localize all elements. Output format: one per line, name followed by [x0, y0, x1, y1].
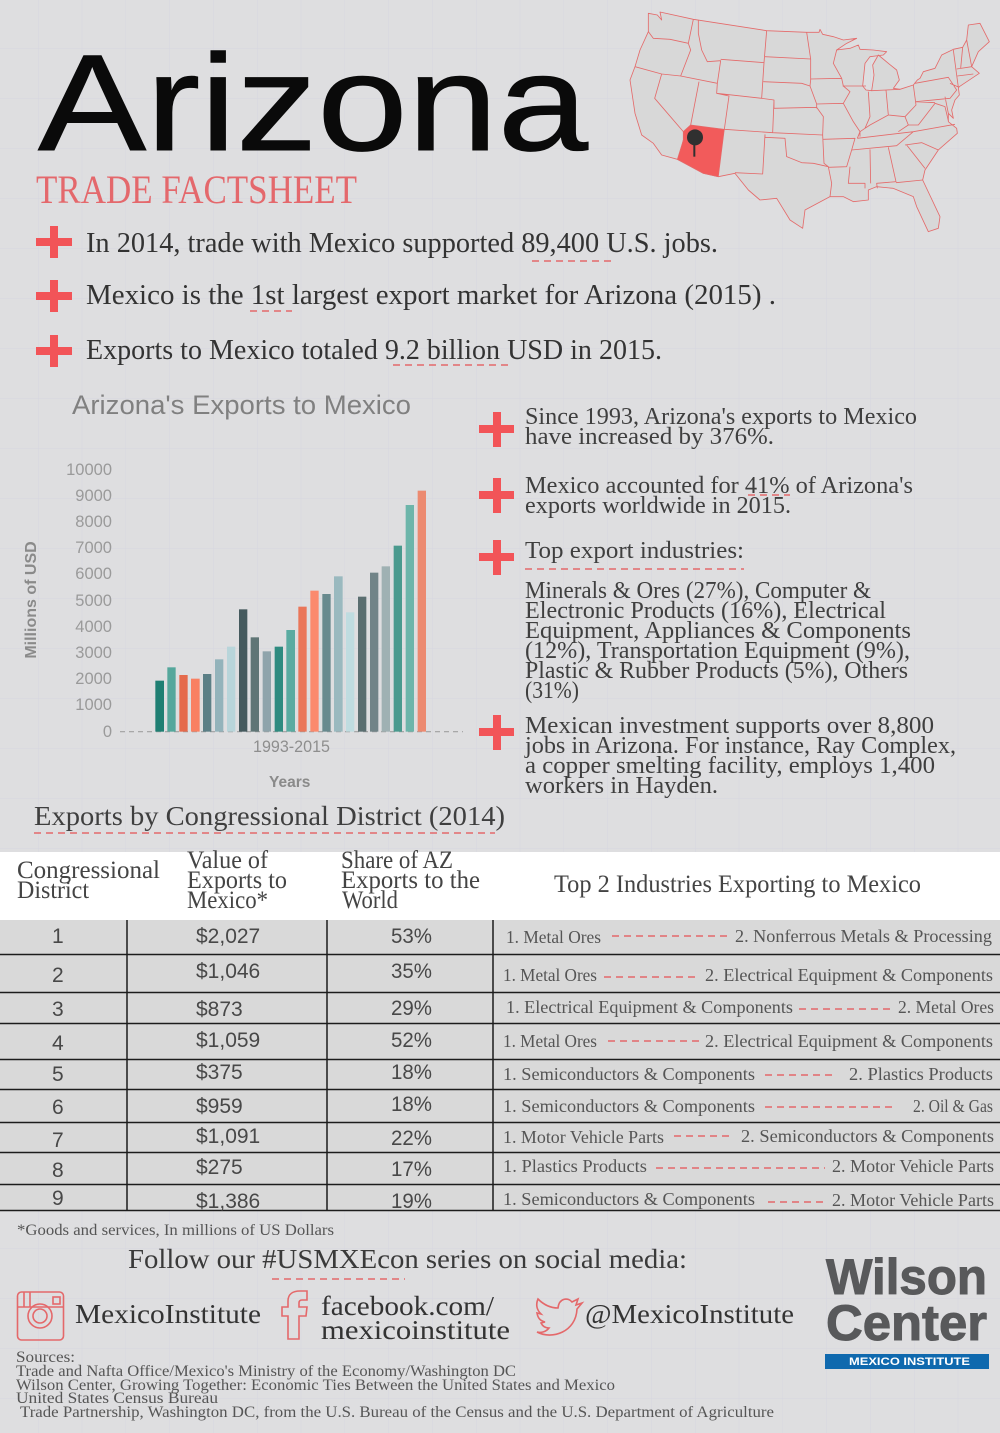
row 4: 4: [52, 1032, 64, 1055]
row 7: [52, 1125, 994, 1152]
row 3: 2. Metal Ores: [898, 997, 994, 1017]
fact: export growth: [479, 403, 917, 450]
fact: top export industries: (12%), Transportation Equipment (9%),: [525, 637, 910, 664]
twitter handle: @MexicoInstitute: [585, 1299, 794, 1329]
row 5: 18%: [391, 1061, 432, 1084]
row 4: 1. Metal Ores: [503, 1031, 597, 1051]
sources: Wilson Center, Growing Together: Economic Ties Between the United States and Mexico: [16, 1377, 615, 1394]
row 6: $959: [196, 1095, 243, 1118]
y axis ticks: 1000: [75, 696, 112, 714]
key fact 3: Exports to Mexico totaled 9.2 billion USD in 2015.: [86, 334, 662, 366]
row 2: $1,046: [196, 960, 260, 983]
row 1: 53%: [391, 925, 432, 948]
row 9: 1. Semiconductors & Components: [503, 1189, 755, 1209]
row 1: 1: [52, 925, 64, 948]
bars: [155, 491, 426, 732]
table: exports by congressional district: [0, 847, 1000, 1213]
y axis ticks: 6000: [75, 565, 112, 583]
row 6: [52, 1093, 993, 1119]
row 7: $1,091: [196, 1125, 260, 1148]
y axis ticks: 5000: [75, 592, 112, 610]
row 4: 2. Electrical Equipment & Components: [705, 1031, 993, 1051]
row 9: [52, 1187, 994, 1213]
table header: District: [17, 877, 89, 904]
row 2: [52, 960, 993, 987]
fact: share of exports: exports worldwide in 2015.: [525, 492, 791, 519]
fact: Mexican investment: Mexican investment supports over 8,800: [525, 712, 934, 739]
y axis ticks: 9000: [75, 487, 112, 505]
fact: export growth: have increased by 376%.: [525, 423, 774, 450]
row 6: 18%: [391, 1093, 432, 1116]
table heading: Exports by Congressional District (2014): [34, 801, 505, 831]
fact: top export industries: Plastic & Rubber Products (5%), Others: [525, 657, 908, 684]
row 8: 2. Motor Vehicle Parts: [832, 1156, 994, 1176]
title: Arizona: [38, 27, 589, 180]
row 8: 8: [52, 1159, 64, 1182]
fact: Mexican investment: [479, 712, 956, 799]
row 9: 19%: [391, 1190, 432, 1213]
fact: share of exports: [479, 472, 913, 519]
row 6: 1. Semiconductors & Components: [503, 1096, 755, 1116]
row 2: 35%: [391, 960, 432, 983]
table header: Congressional: [17, 857, 160, 884]
x axis label: Years: [269, 774, 310, 791]
row 9: 2. Motor Vehicle Parts: [832, 1190, 994, 1210]
row 5: $375: [196, 1061, 243, 1084]
social media heading: Follow our #USMXEcon series on social media:: [128, 1244, 687, 1274]
row 9: 9: [52, 1187, 64, 1210]
y axis ticks: 0: [103, 723, 112, 741]
instagram handle: MexicoInstitute: [75, 1299, 261, 1329]
icon: twitter: [537, 1299, 582, 1335]
row 8: $275: [196, 1156, 243, 1179]
sources: Sources:: [16, 1349, 75, 1366]
sources: [16, 1349, 774, 1421]
sources: Trade Partnership, Washington DC, from the U.S. Bureau of the Census and the U.S. Department of Agriculture: [20, 1404, 774, 1421]
row 7: 22%: [391, 1127, 432, 1150]
logo: Wilson Center Mexico Institute: Center: [826, 1295, 987, 1351]
sources: Trade and Nafta Office/Mexico's Ministry of the Economy/Washington DC: [16, 1363, 516, 1380]
row 1: [52, 925, 992, 948]
row 4: $1,059: [196, 1029, 260, 1052]
row 7: 7: [52, 1129, 64, 1152]
row 2: 2. Electrical Equipment & Components: [705, 965, 993, 985]
logo: Wilson Center Mexico Institute: [825, 1249, 989, 1369]
row 5: [52, 1061, 993, 1086]
y axis ticks: 4000: [75, 618, 112, 636]
row 7: 1. Motor Vehicle Parts: [503, 1127, 664, 1147]
fact: Mexican investment: jobs in Arizona. For instance, Ray Complex,: [524, 732, 956, 759]
fact: top export industries: (31%): [525, 677, 579, 704]
fact: top export industries: Electronic Products (16%), Electrical: [525, 597, 886, 624]
fact: Mexican investment: a copper smelting facility, employs 1,400: [525, 752, 935, 779]
subtitle: TRADE FACTSHEET: [36, 167, 357, 212]
row 6: 6: [52, 1096, 64, 1119]
table header: [0, 847, 1000, 920]
row 9: $1,386: [196, 1190, 260, 1213]
map pin: [687, 129, 703, 157]
row 4: [52, 1029, 993, 1055]
x axis range: 1993-2015: [253, 738, 330, 756]
facebook handle: [321, 1291, 510, 1345]
row 3: 1. Electrical Equipment & Components: [506, 997, 793, 1017]
row 1: $2,027: [196, 925, 260, 948]
row 6: 2. Oil & Gas: [913, 1096, 993, 1116]
icon: facebook: [282, 1291, 307, 1339]
key fact 1: In 2014, trade with Mexico supported 89,400 U.S. jobs.: [86, 227, 718, 259]
fact: top export industries: [479, 537, 911, 704]
y axis ticks: 2000: [75, 670, 112, 688]
key fact 2: Mexico is the 1st largest export market for Arizona (2015) .: [86, 279, 776, 311]
table header: Value of: [187, 847, 269, 874]
facebook handle: facebook.com/: [321, 1291, 495, 1321]
row 5: 2. Plastics Products: [849, 1064, 993, 1084]
row 8: [52, 1156, 994, 1182]
y axis ticks: 10000: [66, 461, 112, 479]
fact: Mexican investment: workers in Hayden.: [525, 772, 718, 799]
row 8: 1. Plastics Products: [503, 1156, 647, 1176]
table header: Mexico*: [187, 887, 268, 914]
row 5: 5: [52, 1063, 64, 1086]
icon: instagram: [18, 1292, 64, 1340]
row 2: 1. Metal Ores: [503, 965, 597, 985]
row 8: 17%: [391, 1158, 432, 1181]
row 5: 1. Semiconductors & Components: [503, 1064, 755, 1084]
row 3: 29%: [391, 997, 432, 1020]
y axis ticks: 8000: [75, 513, 112, 531]
table header: Top 2 Industries Exporting to Mexico: [554, 871, 921, 898]
logo: Wilson Center Mexico Institute: Wilson: [826, 1249, 987, 1305]
row 4: 52%: [391, 1029, 432, 1052]
fact: export growth: Since 1993, Arizona's exports to Mexico: [525, 403, 917, 430]
row 3: [52, 997, 994, 1021]
chart title: Arizona's Exports to Mexico: [72, 390, 411, 420]
fact: top export industries: Minerals & Ores (27%), Computer &: [525, 577, 871, 604]
fact: top export industries: Top export industries:: [525, 537, 744, 564]
row 3: $873: [196, 998, 243, 1021]
y axis ticks: [66, 461, 112, 741]
row 7: 2. Semiconductors & Components: [741, 1126, 994, 1146]
y axis ticks: 7000: [75, 539, 112, 557]
row 3: 3: [52, 998, 64, 1021]
table header: Share of AZ: [341, 847, 453, 874]
table header: World: [342, 887, 398, 914]
y axis label: Millions of USD: [23, 541, 40, 659]
row 1: 1. Metal Ores: [506, 927, 601, 947]
table header: Exports to: [187, 867, 287, 894]
fact: top export industries: Equipment, Appliances & Components: [525, 617, 911, 644]
facebook handle: mexicoinstitute: [321, 1315, 510, 1345]
row 2: 2: [52, 964, 64, 987]
sources: United States Census Bureau: [16, 1390, 218, 1407]
map of the United States: [630, 12, 989, 232]
bar chart: Arizona's exports to Mexico: [23, 390, 463, 791]
baseline: [120, 731, 463, 733]
table header: Exports to the: [341, 867, 480, 894]
footnote: *Goods and services, In millions of US Dollars: [17, 1222, 334, 1239]
row 1: 2. Nonferrous Metals & Processing: [735, 926, 992, 946]
fact: share of exports: Mexico accounted for 41% of Arizona's: [525, 472, 913, 499]
y axis ticks: 3000: [75, 644, 112, 662]
Arizona highlighted: [677, 125, 724, 177]
logo: Wilson Center Mexico Institute: MEXICO INSTITUTE: [849, 1356, 970, 1368]
